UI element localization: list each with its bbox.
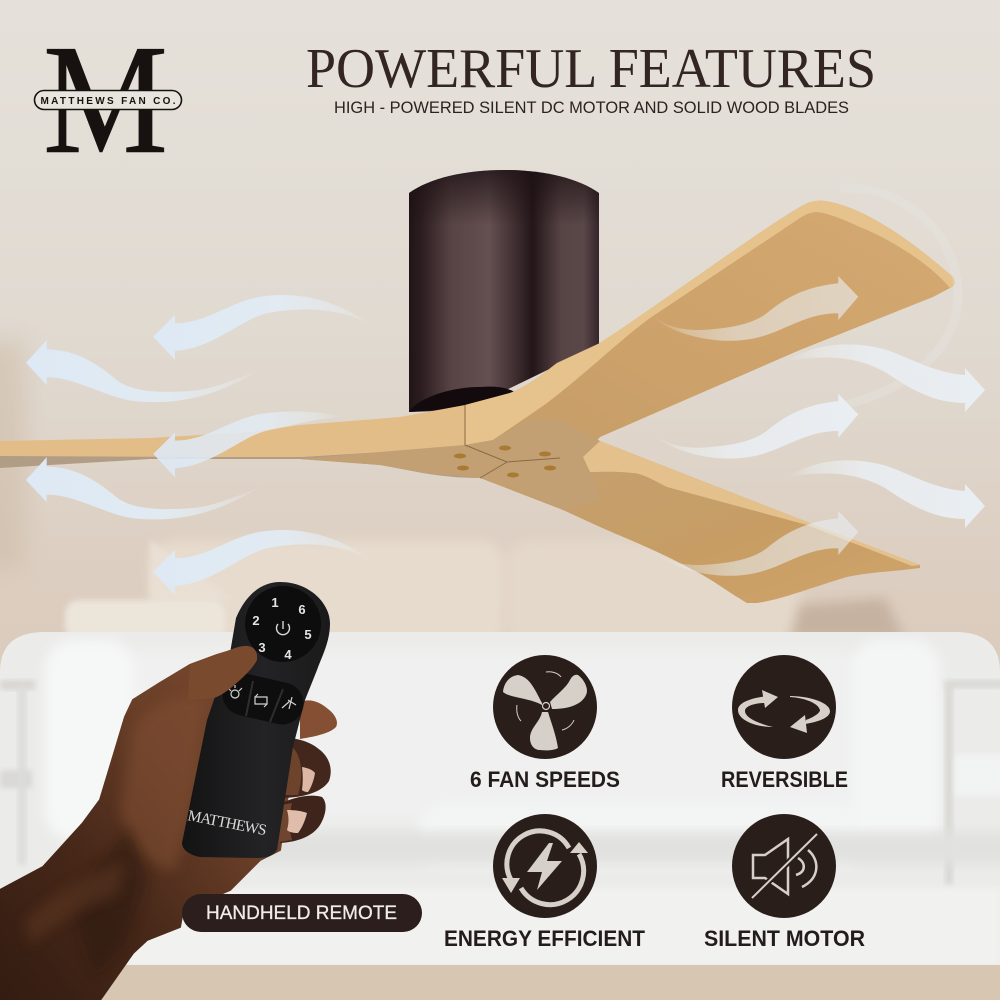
hub underside [300, 418, 600, 510]
speed numbers: 2 [252, 613, 260, 628]
wooden fan blades [0, 201, 955, 603]
logo monogram: M [43, 12, 168, 186]
button bar [218, 669, 308, 729]
arrow left 4 [26, 457, 260, 519]
speed numbers: 3 [258, 640, 266, 655]
middle fingernail [302, 767, 315, 792]
remote body [182, 582, 330, 858]
faint swirl near blade tip [830, 188, 958, 408]
logo band text: MATTHEWS FAN CO. [40, 96, 176, 107]
index finger [300, 700, 337, 739]
arrow right 4 [787, 460, 985, 528]
button icons [228, 685, 296, 709]
fan canopy [409, 170, 599, 412]
upper right blade lit edge [465, 201, 955, 445]
lower right blade lit strip [583, 441, 920, 566]
arrow right 2 [787, 344, 985, 412]
upper right blade [465, 201, 955, 485]
blade seam lines [465, 405, 560, 478]
logo band [34, 90, 182, 110]
hub screws [454, 446, 556, 478]
thumb [188, 646, 257, 700]
brand logo [34, 12, 182, 186]
forearm highlight [25, 862, 125, 945]
speed numbers [252, 595, 312, 662]
arm and palm [0, 646, 290, 1000]
icon: fan [493, 655, 597, 759]
feature: energy efficient [444, 814, 645, 951]
lower right blade [480, 440, 920, 603]
left blade underside [0, 445, 480, 478]
middle finger tip [285, 745, 301, 795]
handheld remote label [182, 894, 422, 932]
arrow right 3 [653, 394, 858, 459]
ring finger [278, 796, 326, 843]
title: POWERFUL FEATURES [306, 38, 876, 100]
arrow left 1 [153, 295, 373, 360]
airflow arrows [26, 188, 985, 595]
label: 6 FAN SPEEDS [470, 767, 620, 792]
palm highlight [120, 696, 205, 870]
arrow right 5 [653, 511, 858, 576]
arrow right 1 [653, 276, 858, 341]
speed numbers: 6 [298, 602, 306, 617]
remote brand text: MATTHEWS [186, 807, 268, 839]
ring fingernail [287, 810, 307, 833]
middle finger [285, 738, 331, 798]
feature: 6 fan speeds [470, 655, 620, 792]
icon: bolt with cycle arrows [493, 814, 597, 918]
arrow left 2 [26, 340, 260, 402]
label: REVERSIBLE [721, 767, 848, 792]
left blade lit face [0, 405, 465, 457]
feature: reversible [721, 655, 848, 792]
speed numbers: 5 [304, 627, 312, 642]
speed numbers: 4 [284, 647, 292, 662]
icon: rotating arrows [732, 655, 836, 759]
hand holding remote [0, 646, 337, 1000]
wrist shadow [70, 830, 148, 975]
label: ENERGY EFFICIENT [444, 926, 645, 951]
remote control [182, 582, 330, 858]
power symbol [276, 621, 290, 635]
handheld remote label: HANDHELD REMOTE [206, 903, 397, 924]
speed numbers: 1 [271, 595, 279, 610]
icon: muted speaker [732, 814, 836, 918]
label: SILENT MOTOR [704, 926, 865, 951]
subtitle: HIGH - POWERED SILENT DC MOTOR AND SOLID WOOD BLADES [334, 99, 849, 117]
arrow left 5 [153, 530, 373, 595]
arrow left 3 [153, 411, 345, 477]
button dividers [246, 681, 283, 722]
feature: silent motor [704, 814, 865, 951]
remote dial [245, 586, 321, 662]
ring finger tip [279, 803, 292, 842]
translucent white feature panel [0, 632, 1000, 965]
